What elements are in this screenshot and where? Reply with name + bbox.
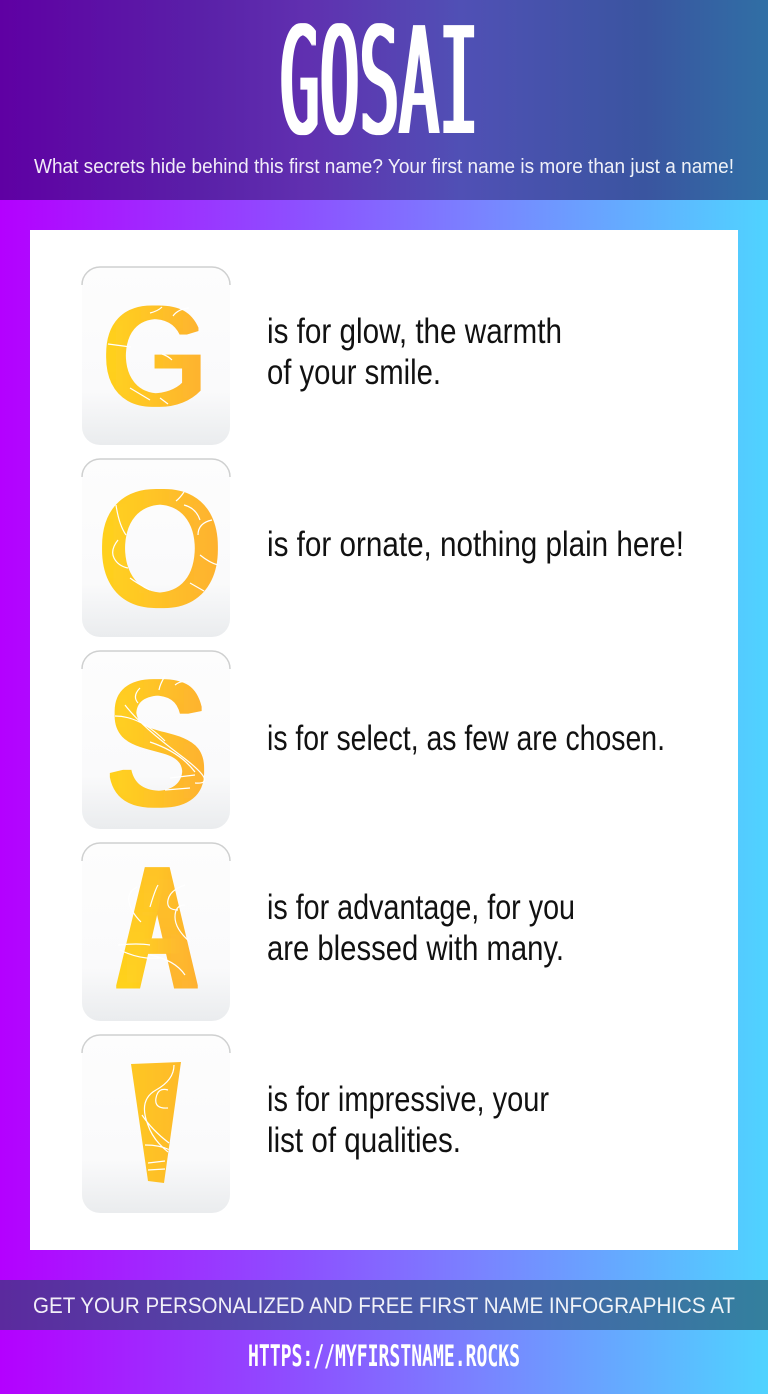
tile: letter S: S bbox=[107, 645, 207, 842]
tile: letter A bbox=[82, 831, 230, 1023]
title: GOSAI bbox=[280, 0, 479, 169]
text: A line: are blessed with many. bbox=[267, 929, 564, 968]
row G bbox=[82, 267, 562, 445]
white content panel bbox=[30, 230, 738, 1250]
row I bbox=[81, 1034, 549, 1213]
tile: letter G bbox=[82, 267, 230, 445]
tile: letter S bbox=[82, 645, 230, 842]
subtitle: What secrets hide behind this first name? Your first name is more than just a name! bbox=[34, 156, 734, 178]
row O bbox=[82, 457, 684, 641]
text: G line bbox=[267, 312, 562, 392]
text: I line bbox=[267, 1080, 549, 1160]
header band bbox=[0, 0, 768, 200]
text: A line bbox=[267, 888, 575, 968]
footer band bbox=[0, 1280, 768, 1330]
text: G line: of your smile. bbox=[267, 353, 441, 392]
tile: letter O: O bbox=[99, 457, 221, 641]
row A bbox=[82, 831, 575, 1023]
tile: letter I: I bbox=[87, 1014, 225, 1232]
text: I line: list of qualities. bbox=[267, 1121, 461, 1160]
row S bbox=[82, 645, 665, 842]
footer url: HTTPS://MYFIRSTNAME.ROCKS bbox=[248, 1339, 520, 1373]
tile: letter A: A bbox=[123, 831, 192, 1023]
tile: letter G: G bbox=[103, 278, 207, 434]
text: A line: is for advantage, for you bbox=[267, 888, 575, 927]
text: G line: is for glow, the warmth bbox=[267, 312, 562, 351]
text: I line: is for impressive, your bbox=[267, 1080, 549, 1119]
text: S line: is for select, as few are chosen. bbox=[267, 719, 665, 758]
text: O line: is for ornate, nothing plain here! bbox=[267, 525, 684, 564]
footer call to action: GET YOUR PERSONALIZED AND FREE FIRST NAME INFOGRAPHICS AT bbox=[33, 1293, 735, 1318]
